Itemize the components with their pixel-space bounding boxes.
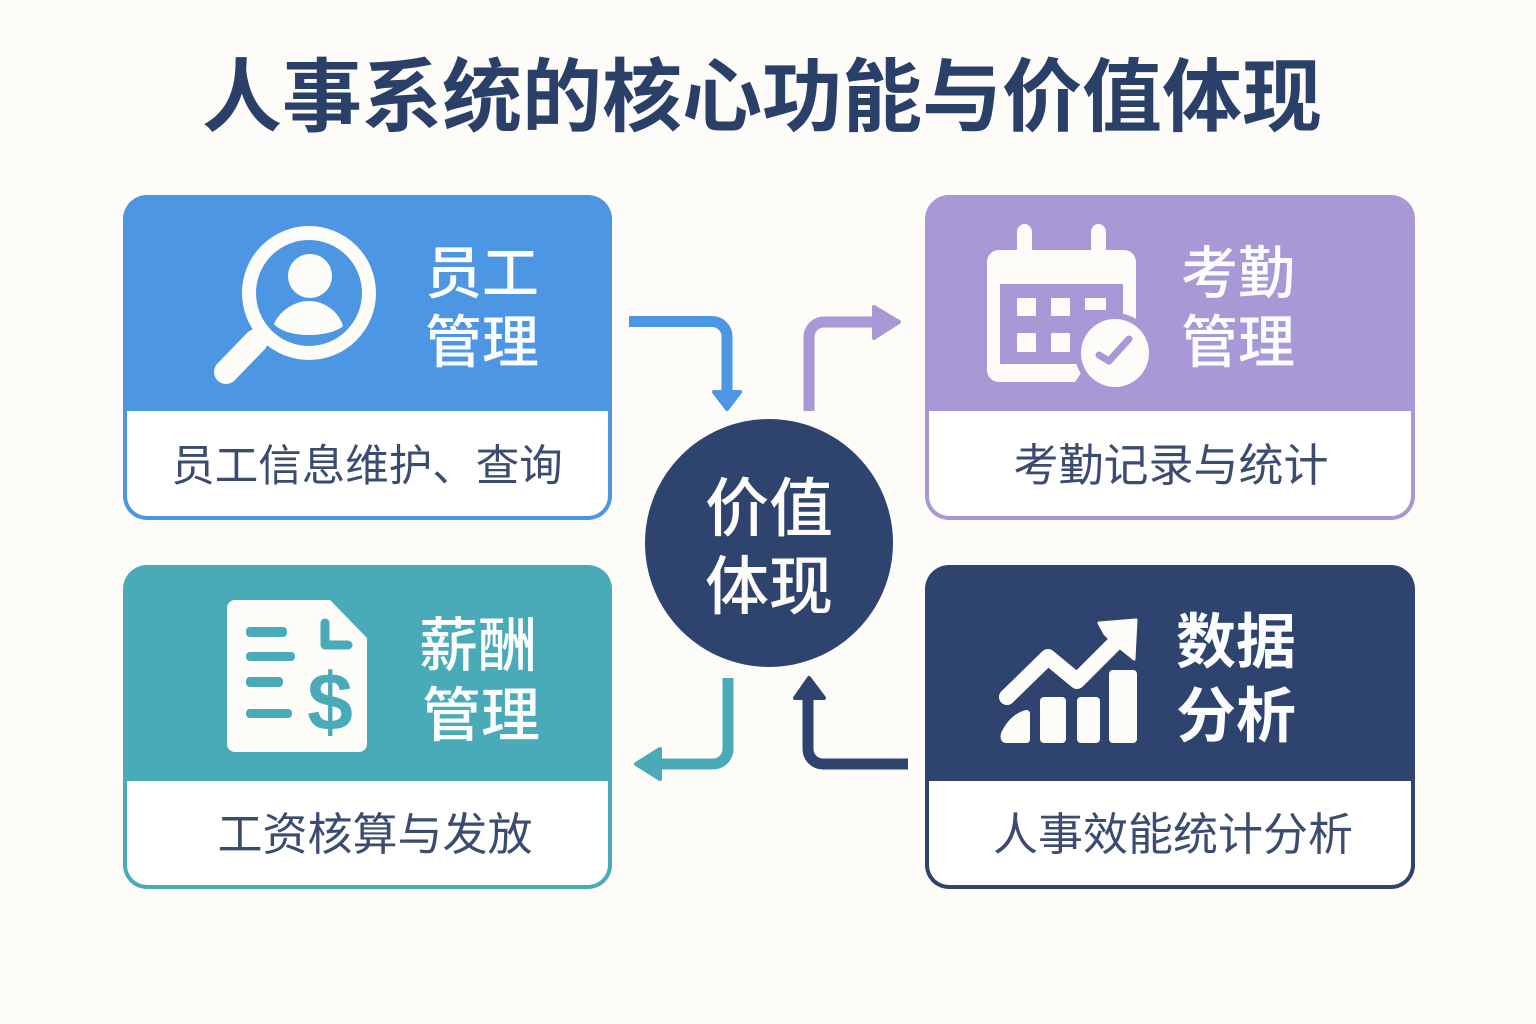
heading: payroll management: 管理 — [422, 683, 540, 749]
heading: attendance management — [1181, 242, 1295, 375]
center circle: value — [645, 419, 893, 667]
heading: payroll management: 薪酬 — [419, 613, 537, 679]
icon: payroll document: $ — [307, 657, 353, 748]
heading: attendance management: 考勤 — [1181, 242, 1295, 306]
heading: employee management — [425, 242, 539, 375]
heading: data analysis: 数据 — [1176, 609, 1296, 676]
heading: data analysis: 分析 — [1176, 683, 1296, 750]
icon: payroll document — [227, 600, 367, 752]
icon: rising bar chart — [1001, 620, 1137, 743]
text: data analysis description: 人事效能统计分析 — [993, 809, 1353, 860]
panel: payroll management — [123, 565, 612, 889]
icon: calendar with check — [987, 224, 1155, 393]
text: payroll description: 工资核算与发放 — [217, 809, 533, 860]
title: 人事系统的核心功能与价值体现 — [202, 53, 1322, 142]
arrow: value to payroll — [636, 678, 728, 779]
heading: payroll management — [419, 613, 540, 749]
center circle: value: 价值 — [705, 473, 833, 545]
heading: attendance management: 管理 — [1181, 311, 1295, 375]
arrow: data analysis to value — [795, 678, 908, 764]
text: attendance description: 考勤记录与统计 — [1013, 440, 1329, 491]
arrow: value to attendance — [809, 307, 899, 411]
text: employee description: 员工信息维护、查询 — [171, 443, 563, 491]
panel: employee management — [123, 195, 612, 520]
center circle: value: 体现 — [705, 551, 833, 623]
arrow: employee to value — [629, 322, 740, 409]
heading: employee management: 员工 — [425, 242, 539, 306]
heading: data analysis — [1176, 609, 1296, 750]
heading: employee management: 管理 — [425, 311, 539, 375]
icon: magnifier with person — [226, 233, 369, 372]
panel: data analysis — [925, 565, 1415, 889]
panel: attendance management — [925, 195, 1415, 520]
